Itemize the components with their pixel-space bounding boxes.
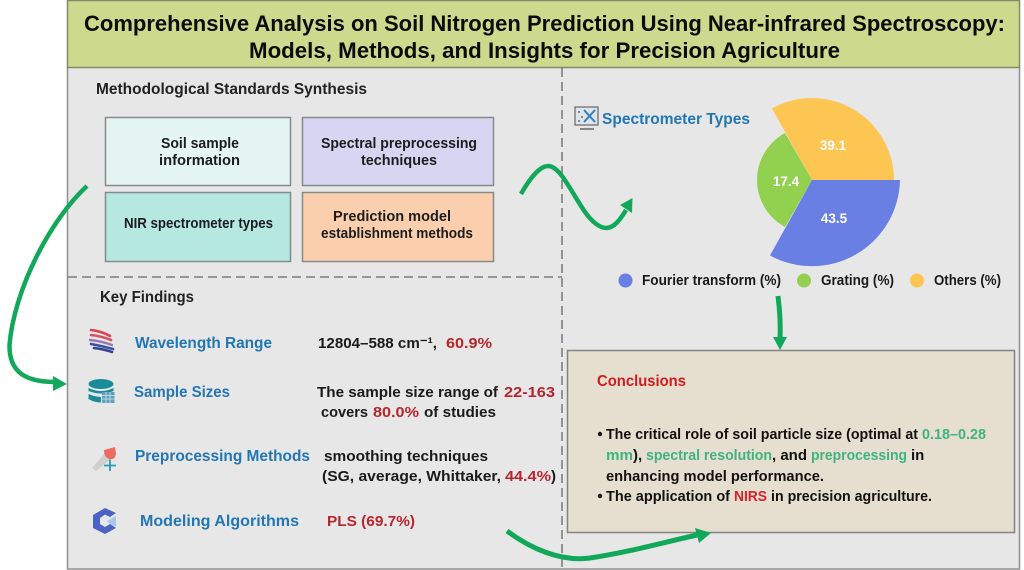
value: preprocessing methods: ) bbox=[551, 468, 556, 485]
icon: hexagon bbox=[93, 508, 116, 534]
icon: pipette bbox=[92, 447, 116, 471]
conclusion text: , and bbox=[772, 447, 807, 464]
conclusion text: The application of bbox=[606, 488, 731, 505]
value: preprocessing methods bbox=[322, 448, 556, 485]
heading: methodological standards: Methodological Standards Synthesis bbox=[96, 81, 367, 98]
pie chart: 17.4 bbox=[773, 174, 800, 189]
label: wavelength range: Wavelength Range bbox=[135, 335, 272, 352]
value: sample sizes: 80.0% bbox=[373, 404, 419, 421]
legend: Others (%) bbox=[934, 273, 1001, 289]
conclusion text: in bbox=[911, 447, 924, 464]
label: modeling algorithms: Modeling Algorithms bbox=[140, 513, 299, 530]
box: NIR spectrometer types bbox=[106, 192, 290, 262]
box: prediction model establishment methods: Prediction model bbox=[333, 209, 451, 225]
box: prediction model establishment methods bbox=[302, 192, 494, 262]
value: preprocessing methods: (SG, average, Whittaker, bbox=[322, 468, 501, 485]
legend: Fourier transform (%) bbox=[642, 273, 781, 289]
pie chart: 43.5 bbox=[821, 211, 848, 226]
box: spectral preprocessing techniques: techniques bbox=[361, 153, 437, 169]
box: soil sample information bbox=[106, 118, 290, 186]
conclusion text: 0.18–0.28 bbox=[922, 426, 986, 443]
conclusion text: spectral resolution bbox=[646, 447, 772, 464]
conclusion text: enhancing model performance. bbox=[606, 468, 824, 485]
conclusion text: preprocessing bbox=[811, 447, 907, 464]
value: sample sizes: The sample size range of bbox=[317, 384, 499, 401]
value: preprocessing methods: 44.4% bbox=[505, 468, 551, 485]
arrow: spectrometer to conclusions bbox=[773, 296, 787, 350]
conclusion text: NIRS bbox=[734, 488, 767, 505]
box: spectral preprocessing techniques bbox=[302, 118, 494, 186]
value: wavelength range bbox=[318, 335, 492, 352]
arrow: methods to findings bbox=[9, 186, 87, 391]
conclusion text bbox=[598, 426, 986, 505]
value: sample sizes: 22-163 bbox=[504, 384, 555, 401]
box: NIR spectrometer types: NIR spectrometer types bbox=[124, 216, 273, 232]
value: sample sizes bbox=[317, 384, 555, 421]
title banner: Comprehensive Analysis on Soil Nitrogen Prediction Using Near-infrared Spectroscopy: bbox=[84, 11, 1005, 36]
heading: key findings: Key Findings bbox=[100, 289, 194, 306]
arrow: findings to conclusions bbox=[507, 528, 711, 559]
conclusion text: mm bbox=[606, 447, 633, 464]
legend bbox=[618, 273, 1001, 289]
label: preprocessing methods: Preprocessing Methods bbox=[135, 448, 310, 465]
value: sample sizes: covers bbox=[321, 404, 368, 421]
box: soil sample information: information bbox=[159, 153, 240, 169]
conclusion text: The critical role of soil particle size (optimal at bbox=[606, 426, 918, 443]
box: prediction model establishment methods: establishment methods bbox=[321, 226, 473, 242]
pie chart bbox=[757, 98, 900, 266]
box: soil sample information: Soil sample bbox=[161, 136, 239, 152]
icon: monitor bbox=[575, 107, 598, 129]
value: wavelength range: 12804–588 cm⁻¹, bbox=[318, 335, 437, 352]
value: PLS: PLS (69.7%) bbox=[327, 513, 415, 530]
value: wavelength range: 60.9% bbox=[446, 335, 492, 352]
label: sample sizes: Sample Sizes bbox=[134, 384, 230, 401]
heading: conclusions: Conclusions bbox=[597, 373, 686, 390]
title banner bbox=[68, 0, 1020, 68]
pie chart: 39.1 bbox=[820, 138, 847, 153]
legend: Grating (%) bbox=[821, 273, 894, 289]
value: sample sizes: of studies bbox=[424, 404, 496, 421]
conclusion text: in precision agriculture. bbox=[771, 488, 932, 505]
icon: wavelength bbox=[90, 330, 113, 352]
title banner: Models, Methods, and Insights for Precision Agriculture bbox=[249, 38, 840, 63]
icon: database bbox=[88, 379, 114, 403]
heading: spectrometer types: Spectrometer Types bbox=[602, 111, 750, 128]
conclusion text: ), bbox=[633, 447, 642, 464]
value: preprocessing methods: smoothing techniques bbox=[324, 448, 488, 465]
arrow: methods to spectrometer bbox=[521, 166, 632, 228]
box: spectral preprocessing techniques: Spectral preprocessing bbox=[321, 136, 477, 152]
panel: conclusions bbox=[568, 350, 1014, 532]
